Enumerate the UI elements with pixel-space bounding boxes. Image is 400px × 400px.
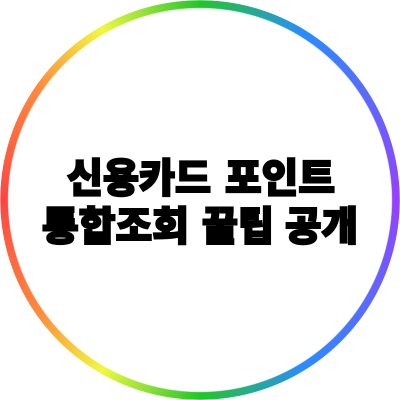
- title line 2: 꿀팁: [202, 205, 274, 249]
- title line 2: [42, 205, 358, 249]
- title line 1: [67, 157, 335, 201]
- title line 1: 포인트: [225, 157, 335, 201]
- title line 2: 통합조회: [42, 205, 189, 249]
- title line 2: 공개: [285, 205, 358, 249]
- title line 1: 신용카드: [67, 157, 211, 201]
